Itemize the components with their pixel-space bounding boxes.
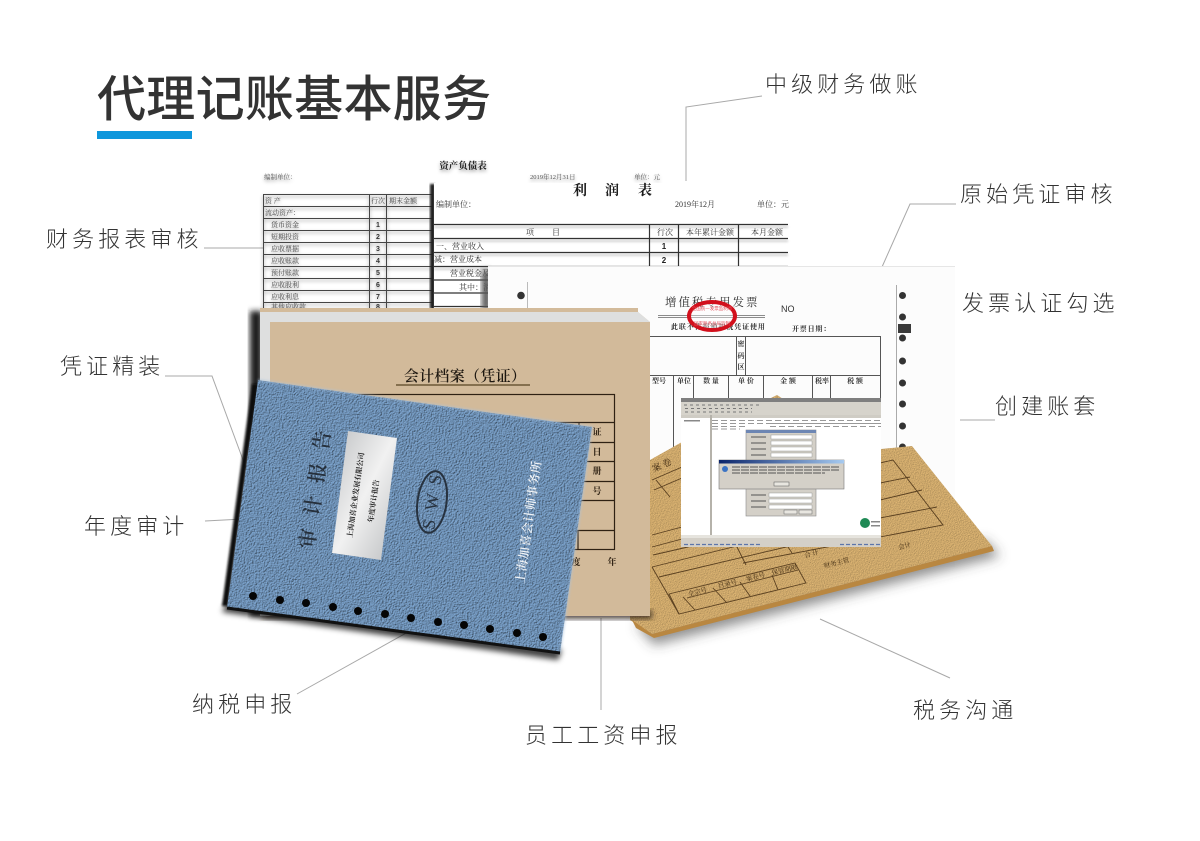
leader lines <box>165 96 995 710</box>
box heading: 会计档案（凭证） <box>404 367 526 385</box>
document: VAT invoice <box>482 266 955 567</box>
envelope printed labels: 保管期限 <box>771 562 799 577</box>
envelope shadow <box>636 540 1000 645</box>
box form table: 证 <box>592 426 602 437</box>
window background <box>681 398 881 547</box>
label: intermediate bookkeeping: 中级财务做账 <box>765 72 922 97</box>
document: income statement <box>430 182 790 309</box>
balance sheet table: 1 <box>376 222 380 229</box>
icon: green software logo <box>860 518 880 528</box>
label: invoice certification: 发票认证勾选 <box>962 291 1119 316</box>
title: 代理记账基本服务 <box>97 73 491 127</box>
invoice double rule <box>658 316 765 318</box>
income statement heading <box>573 182 652 199</box>
label: create account set: 创建账套 <box>995 394 1099 419</box>
envelope body <box>630 395 992 634</box>
envelope printed labels: 合 计 <box>803 547 820 560</box>
label: voucher binding: 凭证精装 <box>60 354 164 379</box>
balance sheet table: 行次 <box>371 196 385 205</box>
income statement sheet <box>434 183 790 309</box>
document: balance sheet <box>263 160 660 311</box>
box form table: 年 <box>607 556 617 567</box>
book top highlight <box>258 380 592 653</box>
balance sheet table: 3 <box>376 246 380 253</box>
invoice table: 区 <box>738 362 744 371</box>
income statement heading: 利 <box>573 183 587 199</box>
income statement meta: 编制单位： <box>436 199 476 209</box>
book left shadow <box>222 384 258 606</box>
box form table <box>330 394 617 567</box>
label: source voucher review: 原始凭证审核 <box>960 182 1117 207</box>
invoice left edge shadow <box>482 270 490 310</box>
invoice heading: 增值税专用发票 <box>665 295 760 309</box>
income statement spine shadow <box>430 184 435 309</box>
balance sheet table: 应收利息 <box>271 292 300 301</box>
balance sheet table: 资 产 <box>265 196 281 205</box>
balance sheet meta: 2019年12月31日 <box>530 172 576 181</box>
envelope printed labels: 全宗号 <box>687 585 708 598</box>
label: financial statement review: 财务报表审核 <box>46 227 203 252</box>
invoice right perforation strip <box>896 285 911 470</box>
income statement table <box>434 224 788 306</box>
icon: red stamp: 国家税务总局监制 <box>694 320 730 327</box>
balance sheet table: 4 <box>376 258 380 265</box>
invoice table: 型号 <box>652 376 666 385</box>
software screenshot <box>681 398 881 547</box>
balance sheet table: 8 <box>376 304 380 311</box>
alert dialog <box>719 460 844 489</box>
window status bars <box>681 535 881 547</box>
income statement meta <box>436 199 789 209</box>
balance sheet table: 其他应收款 <box>271 302 306 311</box>
title accent bar <box>97 131 192 139</box>
book cover <box>227 380 592 653</box>
book binding holes <box>249 592 547 641</box>
income statement table: 1 <box>662 242 667 251</box>
invoice table: 税率 <box>815 376 830 385</box>
income statement table: 行次 <box>657 227 673 237</box>
balance sheet table: 应收账款 <box>271 256 299 265</box>
income statement table: 其中：消 <box>459 282 491 292</box>
invoice table: 单 价 <box>738 376 754 385</box>
income statement meta: 单位：元 <box>757 199 789 209</box>
envelope printed labels: 会计 <box>897 540 912 552</box>
box front <box>270 322 650 615</box>
book bottom edge <box>227 608 560 653</box>
balance sheet table: 应收票据 <box>271 244 299 253</box>
box left shadow <box>250 311 262 616</box>
balance sheet table: 短期投资 <box>271 232 300 241</box>
book title: 审计报告 <box>296 416 337 550</box>
window title bar <box>681 398 881 402</box>
box top edge <box>260 308 650 616</box>
balance sheet table: 5 <box>376 270 380 277</box>
box bottom shadow <box>262 610 652 619</box>
income statement table: 本年累计金额 <box>686 227 735 237</box>
invoice table: 金 额 <box>780 376 797 385</box>
income statement table: 本月金额 <box>751 227 784 237</box>
income statement meta: 2019年12月 <box>675 199 715 209</box>
invoice table: 数 量 <box>703 376 719 385</box>
invoice number: NO <box>781 304 794 314</box>
invoice notes <box>671 322 831 333</box>
income statement heading: 润 <box>605 183 619 199</box>
book logo SWS: SWS <box>418 464 447 531</box>
invoice top edge <box>488 266 955 268</box>
balance sheet table: 流动资产： <box>265 208 300 217</box>
box form table: 日 <box>592 447 602 457</box>
balance sheet table: 6 <box>376 282 380 289</box>
beige archive box <box>250 308 652 619</box>
balance sheet meta <box>264 172 660 181</box>
box form table: 度 <box>571 556 581 567</box>
envelope printed labels <box>650 456 912 598</box>
balance sheet table: 期末金额 <box>389 196 418 205</box>
income statement table: 目 <box>552 228 560 237</box>
box form table: 册 <box>592 466 602 476</box>
invoice table: 单位 <box>677 376 691 385</box>
balance sheet meta: 编制单位： <box>264 172 296 181</box>
book label: 年度审计报告 <box>366 479 381 523</box>
envelope printed form <box>652 460 943 614</box>
envelope printed labels: 案 卷 <box>650 456 673 474</box>
invoice table: 密 <box>738 339 746 348</box>
income statement table: 减：营业成本 <box>434 254 482 264</box>
income statement heading: 表 <box>638 182 652 199</box>
envelope thick edge <box>632 546 994 638</box>
box inner lid band <box>260 312 650 616</box>
income statement table: 2 <box>662 256 667 265</box>
envelope printed labels: 财务主管 <box>823 555 851 570</box>
income statement table: 项 <box>526 228 535 237</box>
book shadow <box>222 600 562 660</box>
document: kraft archive envelope <box>630 395 1000 645</box>
label: annual audit: 年度审计 <box>84 514 188 539</box>
data grid <box>712 415 881 429</box>
envelope printed labels: 目录号 <box>717 577 738 590</box>
invoice table <box>650 336 880 450</box>
envelope printed labels: 案卷号 <box>745 570 766 583</box>
book label: 上海加喜企业发展有限公司 <box>345 452 366 538</box>
icon: red stamp: 全国统一发票监制章 <box>692 305 733 312</box>
balance sheet table: 7 <box>376 294 380 301</box>
balance sheet table: 货币资金 <box>271 220 299 229</box>
income statement table: 营业税金及 <box>450 268 490 278</box>
balance sheet table <box>263 194 432 311</box>
box heading underline <box>396 384 530 386</box>
book label <box>332 431 397 560</box>
invoice notes: 此联不作报销扣税凭证使用 <box>671 322 766 331</box>
income statement table: 一、营业收入 <box>436 241 484 251</box>
window toolbar <box>681 402 881 415</box>
invoice sheet <box>488 267 955 567</box>
balance sheet meta: 单位：元 <box>634 172 660 181</box>
invoice left perforation <box>517 282 528 312</box>
label: payroll filing: 员工工资申报 <box>525 723 682 748</box>
left navigation pane <box>681 415 712 535</box>
back dialog <box>746 430 816 516</box>
icon: red stamp <box>689 302 735 330</box>
box form table: 号 <box>592 485 602 496</box>
balance sheet heading: 资产负债表 <box>439 160 487 172</box>
invoice notes: 开票日期： <box>792 324 831 333</box>
label: tax communication: 税务沟通 <box>913 698 1017 723</box>
invoice table: 税 额 <box>847 376 864 385</box>
label: tax filing: 纳税申报 <box>192 692 296 717</box>
book firm name: 上海加喜会计师事务所 <box>512 460 544 584</box>
invoice table: 码 <box>738 351 744 360</box>
balance sheet table: 应收股利 <box>271 280 299 289</box>
balance sheet table: 2 <box>376 234 380 241</box>
balance sheet table: 预付账款 <box>271 268 299 277</box>
blue audit report book <box>222 380 592 660</box>
